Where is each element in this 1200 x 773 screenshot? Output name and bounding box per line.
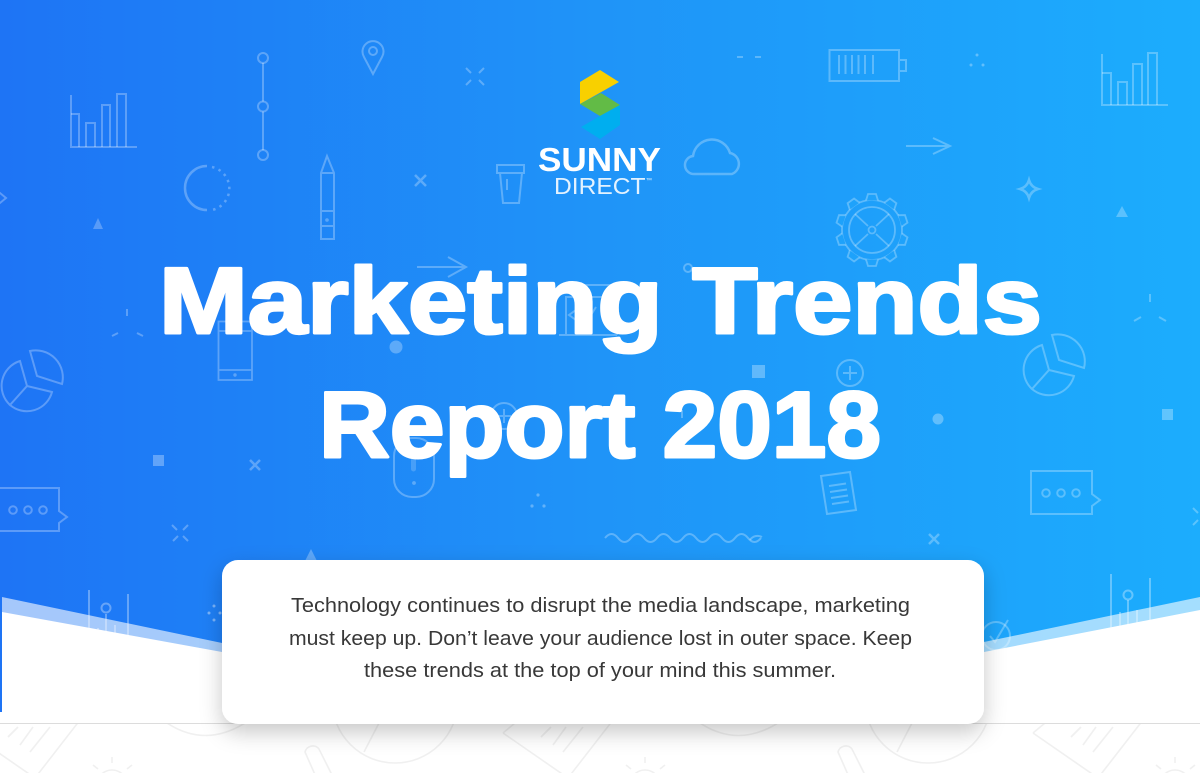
icon: bar chart left [71, 94, 137, 147]
icon: document [821, 472, 856, 514]
icon: small ring [684, 264, 692, 272]
logo [538, 70, 661, 199]
icon: gear [836, 194, 908, 266]
icon: cup [497, 165, 524, 203]
intro text [289, 595, 912, 682]
icon: sparks top [466, 68, 484, 85]
intro card [222, 560, 984, 724]
icon: pie chart right [1024, 334, 1085, 395]
icon: dot right [932, 414, 944, 424]
icon: map pin [363, 41, 384, 74]
icon: pie chart left [2, 350, 63, 411]
faint icon pattern strip [0, 724, 1196, 773]
icon: loading ring [185, 166, 229, 210]
icon: check circle [982, 620, 1010, 650]
intro text: Technology continues to disrupt the media landscape, marketing [291, 595, 910, 617]
icon: arrow right [906, 138, 950, 154]
icon: sunburst left [112, 309, 143, 336]
icon: plus circle centre [491, 403, 517, 429]
intro text: these trends at the top of your mind this summer. [364, 660, 836, 682]
icon: arrow under title [417, 257, 466, 277]
logo word: sunny: SUNNY [538, 141, 661, 178]
icon: dot [390, 340, 402, 354]
icon: square far right [1162, 409, 1173, 420]
icon: square centre [752, 365, 765, 378]
icon: data chart bottom left [89, 590, 128, 640]
icon: speech bubble left [0, 488, 67, 531]
icon: timeline [258, 53, 268, 160]
icon: triangle above card [305, 549, 317, 561]
icon: triangle left [93, 218, 103, 229]
icon: data chart bottom right [1111, 574, 1150, 630]
logo word: direct: ™ [646, 177, 652, 184]
intro text: must keep up. Don’t leave your audience lost in outer space. Keep [289, 628, 912, 650]
icon: sunburst right [1134, 294, 1166, 321]
icon: speech bubble right [1031, 471, 1100, 514]
icon: plus circle right [837, 360, 863, 386]
icon: wave [605, 534, 761, 542]
icon: cloud [685, 140, 739, 174]
icon: phone [218, 322, 252, 380]
title [159, 248, 1042, 477]
icon: cross left [250, 460, 260, 470]
icon: cross [415, 175, 426, 186]
icon: mouse [394, 438, 434, 497]
icon: dots top right [970, 54, 984, 66]
icon: left edge diamond [0, 193, 6, 203]
title line 2: Report 2018 [319, 372, 881, 477]
logo word: direct: DIRECT [554, 173, 640, 199]
icon: pencil [321, 156, 334, 239]
icon: dashes [737, 56, 761, 58]
icon: code window [559, 285, 617, 335]
icon: dots by card [208, 604, 222, 622]
icon: battery [830, 50, 906, 81]
icon: small diamond [1020, 180, 1038, 198]
left edge cover [0, 712, 2, 724]
icon: sparks far right [1193, 508, 1198, 525]
icon: sunburst centre [665, 410, 682, 447]
title line 1: Marketing Trends [159, 248, 1042, 353]
icon: cross right [929, 534, 939, 544]
icon: bar chart right [1102, 53, 1168, 105]
icon: sparks left [172, 525, 188, 541]
white lower section [2, 610, 1200, 724]
icon: square left [153, 455, 164, 466]
logo mark [580, 70, 620, 139]
icon: dots centre [530, 493, 546, 508]
divider [0, 723, 1200, 724]
background icons [0, 41, 1198, 650]
icon: triangle right [1116, 206, 1128, 217]
curved base: light band [2, 597, 1200, 724]
icon: arc [750, 536, 762, 540]
